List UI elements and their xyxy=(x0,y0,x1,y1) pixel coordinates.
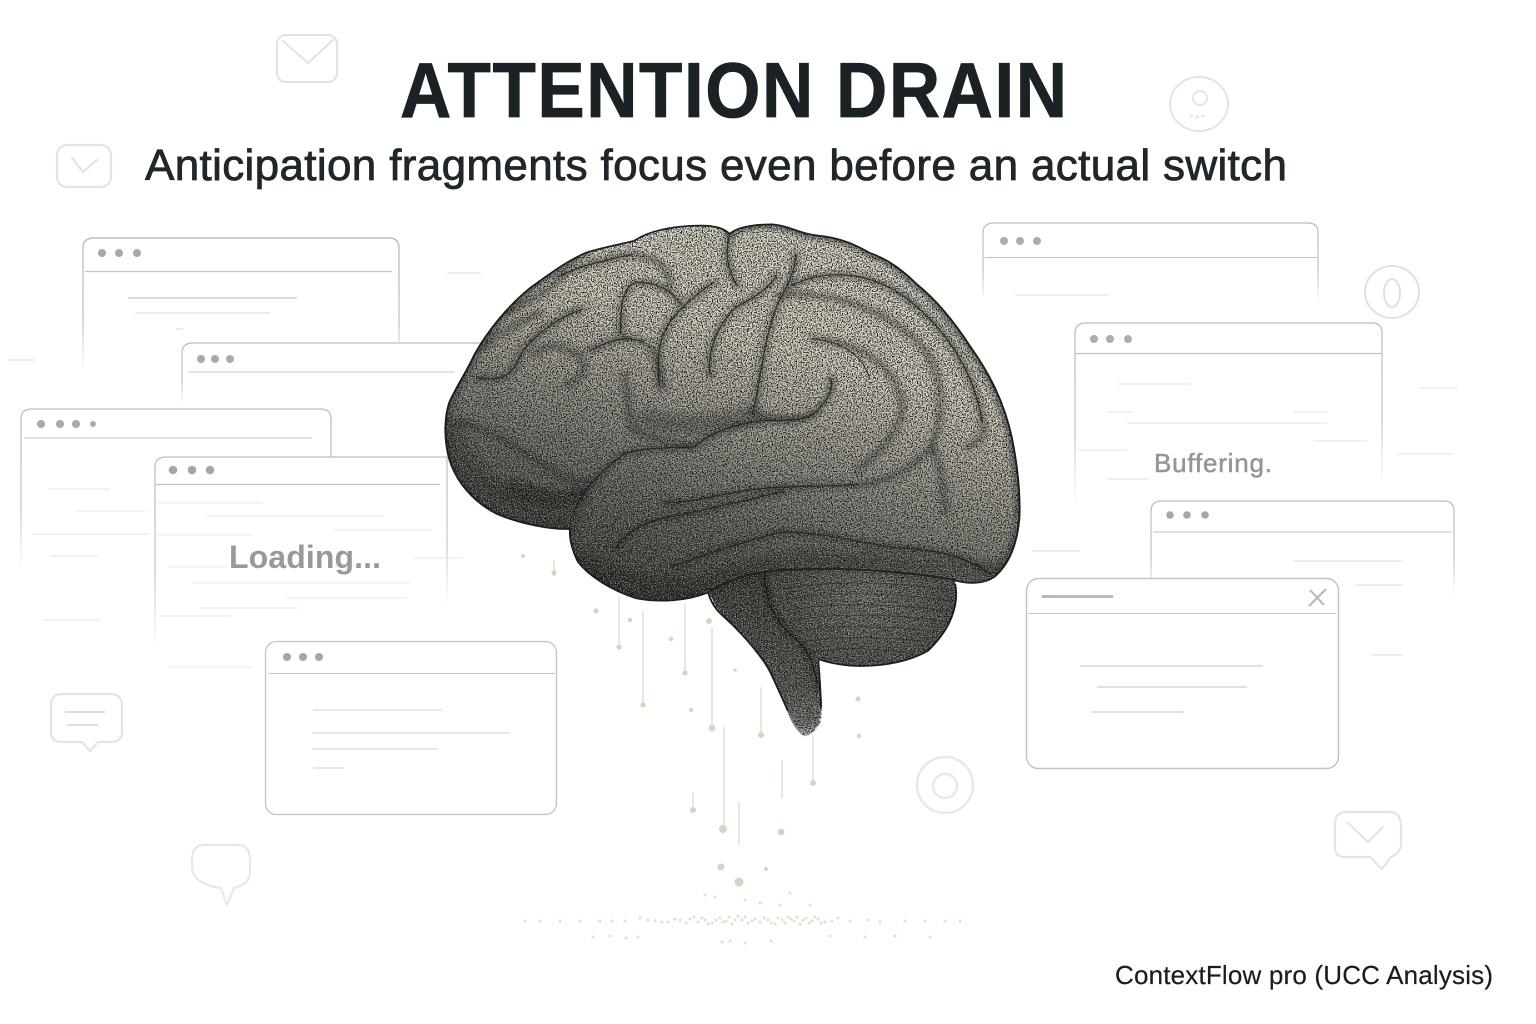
soft fold shadows xyxy=(457,234,990,574)
icon: circle notification top right xyxy=(1170,77,1228,131)
window: left front xyxy=(266,642,556,814)
icon: ring lower centre xyxy=(917,757,973,813)
icon: empty speech bubble xyxy=(192,845,250,905)
window: right front with close button xyxy=(1026,578,1338,768)
window: Buffering xyxy=(1075,323,1457,505)
window: back right top xyxy=(983,223,1318,305)
window: back left middle xyxy=(182,343,490,405)
sulci and folds xyxy=(440,220,1030,740)
brainstem crease xyxy=(765,575,817,690)
window: back right lower xyxy=(1032,501,1454,655)
stipple grain xyxy=(440,220,1030,740)
icon: chat bubble left xyxy=(51,694,122,751)
label: Loading: Loading... xyxy=(229,539,381,575)
icon: ring right xyxy=(1365,266,1419,318)
icon: envelope beside subtitle xyxy=(57,145,111,187)
brain outline xyxy=(445,224,1020,711)
rim shading xyxy=(445,224,1020,601)
icon: envelope top left xyxy=(277,35,337,82)
crisp sulcus lines over grain xyxy=(477,234,990,707)
subtitle: Anticipation fragments focus even before an actual switch xyxy=(145,141,1287,190)
icon: close xyxy=(1309,589,1326,606)
cerebrum fill xyxy=(445,224,1020,601)
broad lower shading xyxy=(453,416,1006,588)
label: Buffering: Buffering. xyxy=(1154,448,1272,478)
brainstem and cerebellum xyxy=(708,560,956,737)
cerebellum folia xyxy=(776,583,953,654)
source credit: ContextFlow pro (UCC Analysis) xyxy=(1115,960,1493,990)
title: ATTENTION DRAIN xyxy=(400,46,1067,134)
window: left outer xyxy=(21,409,331,620)
window: Loading xyxy=(155,457,463,667)
brain illustration xyxy=(440,220,1030,740)
faint stray marks xyxy=(9,273,481,360)
window: back left top xyxy=(83,238,399,372)
icon: mail speech bubble xyxy=(1335,812,1401,869)
brain drips and dust xyxy=(521,554,960,943)
